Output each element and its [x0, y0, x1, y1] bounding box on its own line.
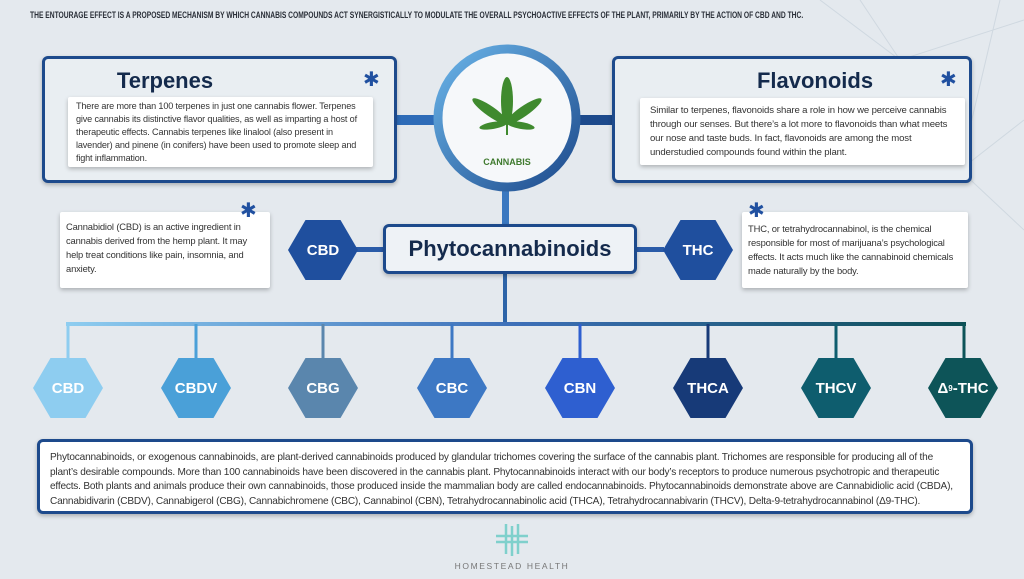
hex: CBC — [417, 358, 487, 418]
hex: cbd top: CBD — [307, 242, 339, 258]
logo text: HOMESTEAD HEALTH — [455, 561, 569, 571]
thc note: THC, or tetrahydrocannabinol, is the chemical responsible for most of marijuana’s psychological effects. It acts much like the cannabinoid chemicals made naturally by the body. — [748, 223, 953, 276]
center circle: cannabis: CANNABIS — [483, 157, 531, 167]
hex: CBDV — [161, 358, 231, 418]
hex: D9-THC: 9 — [948, 384, 953, 392]
hex: cbd top — [288, 220, 358, 280]
title: THE ENTOURAGE EFFECT IS A PROPOSED MECHANISM BY WHICH CANNABIS COMPOUNDS ACT SYNERGISTICALLY TO MODULATE THE OVERALL PSYCHOACTIVE EFFECTS OF THE PLANT, PRIMARILY BY THE ACTION OF CBD AND THC. — [30, 10, 803, 20]
hex: CBN: CBN — [564, 380, 596, 396]
hex: CBN — [545, 358, 615, 418]
hex: THCA: THCA — [687, 380, 729, 396]
bottom description box: Cannabidivarin (CBDV), Cannabigerol (CBG), Cannabichromene (CBC), Cannabinol (CBN), Tetrahydrocannabinolic acid (THCA), Tetrahydrocannabivarin (THCV), Delta-9-tetrahydrocannabinol (Δ9-THC). — [50, 496, 920, 506]
hex: thc top — [663, 220, 733, 280]
thc note — [742, 212, 968, 288]
bottom description box — [37, 439, 973, 514]
hex: CBD — [33, 358, 103, 418]
heading: flavonoids: Flavonoids — [757, 68, 873, 93]
center circle: cannabis — [434, 44, 580, 192]
phytocannabinoids box: Phytocannabinoids — [409, 236, 611, 261]
logo — [496, 524, 528, 556]
hex: THCA — [673, 358, 743, 418]
icon: leaf: ✱ — [940, 69, 957, 91]
bottom description box: plant’s desirable compounds. More than 100 cannabinoids have been discovered in the cannabis plant. Phytocannabinoids interact with our body’s receptors to produce numerous psychotropic and therapeutic — [50, 466, 939, 478]
hex: D9-THC: Δ -THC — [937, 380, 989, 396]
icon: leaf: ✱ — [363, 69, 380, 91]
hex: CBG: CBG — [306, 380, 340, 396]
hex: THCV — [801, 358, 871, 418]
hex: CBD: CBD — [52, 380, 84, 396]
phytocannabinoids box — [383, 224, 637, 274]
hex: CBG — [288, 358, 358, 418]
panel: terpenes — [42, 56, 397, 183]
panel: flavonoids — [612, 56, 972, 183]
hex row — [33, 358, 998, 418]
cbd note — [60, 212, 270, 288]
heading: terpenes: Terpenes — [117, 68, 213, 93]
icon: leaf right: ✱ — [748, 200, 765, 222]
hex: thc top: THC — [683, 242, 713, 258]
text: flavonoids: Similar to terpenes, flavonoids share a role in how we perceive cannabis through our senses. But there’s a lot more to flavonoids than what meets our nose and taste buds. In fact, flavonoids are among the most understudied compounds found within the plant. — [650, 105, 947, 158]
cbd note: Cannabidiol (CBD) is an active ingredient in cannabis derived from the hemp plant. It may help treat conditions like pain, insomnia, and anxiety. — [66, 221, 247, 274]
hex: D9-THC — [928, 358, 998, 418]
bottom description box: effects. Both plants and animals produce their own cannabinoids, those produced inside the mammalian body are called endocannabinoids. Phytocannabinoids demonstrate above are Cannabidiolic acid (CBDA), — [50, 481, 953, 492]
hex: CBC: CBC — [436, 380, 468, 396]
hex: THCV: THCV — [816, 380, 856, 396]
icon: leaf left: ✱ — [240, 200, 257, 222]
text: terpenes: There are more than 100 terpenes in just one cannabis flower. Terpenes give cannabis its distinctive flavor qualities, as well as imparting a host of therapeutic effects. Cannabis terpenes like linalool (also present in lavender) and pinene (in conifers) have been used to promote sleep and fight inflammation. — [76, 101, 357, 163]
bottom description box: Phytocannabinoids, or exogenous cannabinoids, are plant-derived cannabinoids produced by glandular trichomes covering the surface of the cannabis plant. Trichomes are responsible for producing all of the — [50, 452, 933, 463]
hex: CBDV: CBDV — [175, 380, 217, 396]
